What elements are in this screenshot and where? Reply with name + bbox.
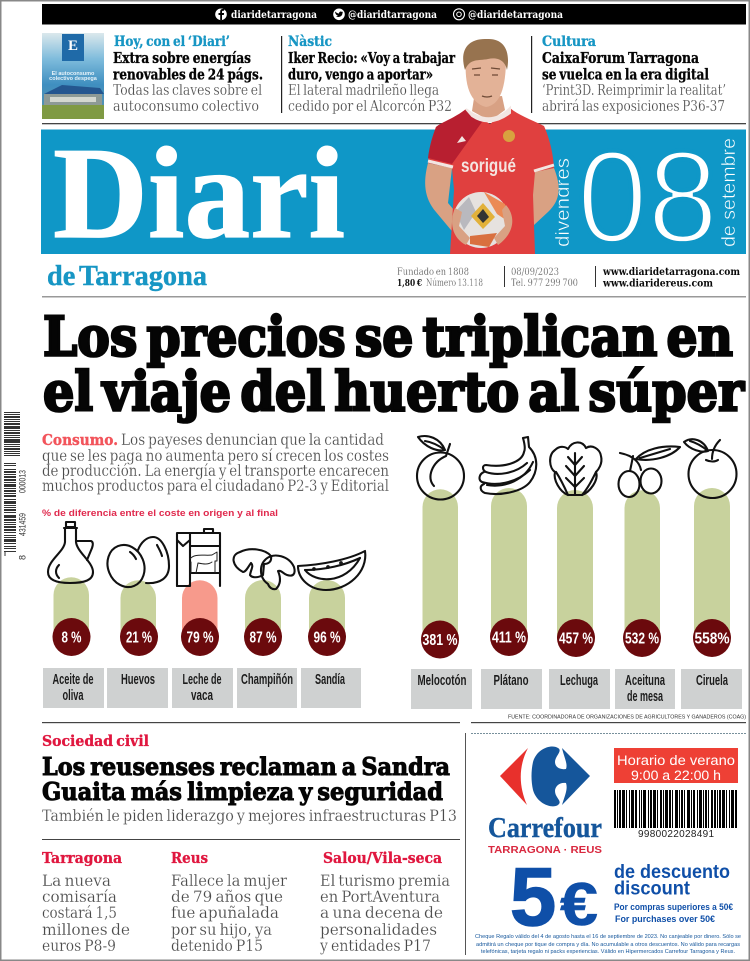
date and phone xyxy=(511,267,578,289)
summary: autoconsumo colectivo xyxy=(113,99,259,115)
hands xyxy=(452,208,470,245)
edition details: 1,80 € xyxy=(397,278,422,289)
sponsor: sorigué xyxy=(461,156,516,177)
teaser: Hoy, con el Diari xyxy=(42,33,263,119)
adidas mark xyxy=(457,136,466,143)
opening hours box: 9:00 a 22:00 h xyxy=(631,768,721,783)
date and phone: Tel. 977 299 700 xyxy=(511,278,578,289)
headline xyxy=(113,50,263,84)
edition details xyxy=(397,267,483,289)
icon: facebook xyxy=(215,8,227,20)
hair xyxy=(463,39,508,70)
label: aceite de oliva xyxy=(43,668,104,708)
label: leche de vaca xyxy=(172,668,233,708)
brief: Tarragona: comisaría xyxy=(42,887,117,906)
headline xyxy=(542,50,709,84)
discount description: For purchases over 50€ xyxy=(615,914,715,924)
month: de setembre xyxy=(719,138,740,247)
bar: aceite de oliva xyxy=(52,577,90,656)
headline: Guaita más limpieza y seguridad xyxy=(42,777,443,806)
bar: aceituna de mesa: 532 % xyxy=(625,630,659,648)
coupon barcode: 9980022028491 xyxy=(638,829,714,840)
intro paragraph: de producción. La energía y el transporte encarecen xyxy=(42,462,389,480)
summary: El lateral madrileño llega xyxy=(288,83,439,99)
discount amount: 5 xyxy=(510,850,556,943)
label: huevos: Huevos xyxy=(121,672,155,688)
day number: 08 xyxy=(577,123,718,270)
collar xyxy=(466,108,510,121)
product barcode: 8 xyxy=(18,555,28,560)
label: lechuga: Lechuga xyxy=(560,673,599,689)
opening hours box: Horario de verano xyxy=(617,753,735,768)
brief: Reus: Reus xyxy=(171,850,208,867)
icon: peach xyxy=(417,436,464,500)
icon: Carrefour logo xyxy=(500,747,590,806)
label: leche de vaca: vaca xyxy=(191,688,214,704)
icon: milk carton xyxy=(177,529,220,586)
discount description: discount xyxy=(614,878,691,900)
brief: Reus: por su hijo, ya xyxy=(171,920,272,939)
bar: ciruela: 558% xyxy=(694,630,730,648)
chart: low-margin products xyxy=(43,522,365,708)
label: aceituna de mesa xyxy=(615,669,675,709)
bar: melocotón xyxy=(421,489,459,658)
headline: se vuelca en la era digital xyxy=(542,66,709,84)
product barcode xyxy=(5,412,28,560)
weekday: divendres xyxy=(553,158,574,247)
chart subtitle: % de diferencia entre el coste en origen y al final xyxy=(42,508,278,518)
label: ciruela xyxy=(681,669,742,709)
headline: renovables de 24 págs. xyxy=(113,66,263,84)
summary: Todas las claves sobre el xyxy=(113,83,262,99)
headline: CaixaForum Tarragona xyxy=(542,50,700,67)
brief: Reus: de 79 años que xyxy=(171,887,283,906)
bar: champiñón: 87 % xyxy=(250,630,277,646)
label: melocotón xyxy=(411,669,472,709)
intro paragraph: muchos productos para el ciudadano P2-3 y Editorial xyxy=(42,477,389,495)
summary xyxy=(542,83,726,115)
brief: Reus: Fallece la mujer xyxy=(171,871,287,890)
headline xyxy=(42,752,450,806)
social media bar xyxy=(42,4,746,24)
magazine cover thumbnail: colectivo despega xyxy=(49,76,98,82)
brief: Salou/Vila-seca: Salou/Vila-seca xyxy=(323,850,443,867)
brief: Tarragona: costará 1,5 xyxy=(42,903,117,922)
bar: huevos: 21 % xyxy=(126,630,152,646)
jersey xyxy=(428,108,554,254)
bar: sandía xyxy=(308,580,346,656)
bar: lechuga xyxy=(557,490,595,657)
discount description: Por compras superiores a 50€ xyxy=(614,902,733,912)
advertisement: Carrefour coupon xyxy=(471,734,746,955)
bar: plátano: 411 % xyxy=(492,630,526,646)
icon: plum xyxy=(684,439,736,498)
label: champiñón: Champiñón xyxy=(241,672,293,688)
neck xyxy=(472,96,505,121)
headline: Extra sobre energías xyxy=(113,50,251,67)
icon: olives xyxy=(618,446,680,497)
store location: TARRAGONA · REUS xyxy=(488,844,602,856)
brief: Reus: fue apuñalada xyxy=(171,903,279,922)
brief: Reus: detenido P15 xyxy=(171,936,263,955)
product barcode: 000013 xyxy=(18,470,28,493)
brief: Tarragona: millones de xyxy=(42,920,130,939)
bar: plátano xyxy=(490,488,528,656)
headline: Los reusenses reclaman a Sandra xyxy=(42,752,450,781)
logo wordmark: Carrefour xyxy=(488,813,602,844)
subtitle: de Tarragona: de Tarragona xyxy=(47,260,207,292)
bar: sandía: 96 % xyxy=(314,630,341,646)
section label: Cultura xyxy=(542,34,596,50)
masthead band xyxy=(41,121,746,270)
section label: Sociedad civil xyxy=(42,733,149,750)
section label: Hoy, con el ‘Diari’ xyxy=(114,34,230,50)
summary xyxy=(288,83,452,115)
magazine cover thumbnail xyxy=(42,33,104,119)
label: huevos xyxy=(107,668,168,708)
summary xyxy=(113,83,262,115)
story: Sociedad civil xyxy=(42,733,457,825)
brief: Tarragona: Tarragona xyxy=(42,850,123,867)
bar: huevos xyxy=(120,580,158,656)
brief: Reus xyxy=(171,850,287,955)
instagram handle: @diaridetarragona xyxy=(468,9,563,21)
intro paragraph: que se les paga no aumenta pero sí crecen los costes xyxy=(42,447,389,465)
intro paragraph xyxy=(42,431,389,495)
bar: melocotón: 381 % xyxy=(422,632,458,649)
arms xyxy=(425,163,466,236)
label: aceite de oliva: oliva xyxy=(62,688,84,704)
label: melocotón: Melocotón xyxy=(418,673,466,689)
brief: Salou/Vila-seca: y entidades P17 xyxy=(319,936,431,955)
bar: aceituna de mesa xyxy=(623,490,661,657)
crest xyxy=(503,130,515,142)
label: aceite de oliva: Aceite de xyxy=(52,672,94,688)
intro paragraph: Los payeses denuncian que la cantidad xyxy=(121,431,384,449)
label: sandía: Sandía xyxy=(315,672,346,688)
bar: aceite de oliva: 8 % xyxy=(62,630,82,646)
facial features xyxy=(472,68,500,97)
icon: instagram xyxy=(454,9,464,20)
brief: Salou/Vila-seca: en PortAventura xyxy=(320,887,440,906)
fine print xyxy=(475,934,741,955)
sleeve trim xyxy=(428,161,554,171)
product barcode: 431459 xyxy=(18,513,28,536)
jersey dark shoulder xyxy=(428,109,482,164)
date and phone: 08/09/2023 xyxy=(511,267,559,278)
bar: champiñón xyxy=(244,580,282,656)
summary: También le piden liderazgo y mejores infraestructuras P13 xyxy=(42,806,457,825)
source note: FUENTE: COORDINADORA DE ORGANIZACIONES DE AGRICULTORES Y GANADEROS (COAG) xyxy=(508,714,746,720)
chart: high-margin products xyxy=(411,436,742,709)
bar: leche de vaca: 79 % xyxy=(186,630,214,646)
brief: Salou/Vila-seca: personalidades xyxy=(320,920,437,939)
brief: Salou/Vila-seca xyxy=(319,850,450,955)
icon: eggs xyxy=(101,537,169,593)
facebook handle: diaridetarragona xyxy=(231,9,317,21)
brief: Tarragona xyxy=(42,850,130,955)
label: sandía xyxy=(301,668,361,708)
label: champiñón xyxy=(237,668,297,708)
main headline xyxy=(43,304,744,424)
icon: watermelon xyxy=(298,551,365,590)
ball xyxy=(453,192,509,248)
icon: bananas xyxy=(480,437,536,494)
headline xyxy=(288,50,455,84)
fine print: telefónicas, tarjeta regalo ni packs experiencias. Válido en Hipermercados Carrefour Tarragona y Reus. xyxy=(481,949,735,955)
edition details: Número 13.118 xyxy=(426,278,483,289)
headline: Iker Recio: «Voy a trabajar xyxy=(288,50,455,67)
face xyxy=(466,48,506,107)
websites: www.diaridereus.com xyxy=(602,278,713,290)
label: plátano: Plátano xyxy=(494,673,529,689)
discount amount: € xyxy=(560,871,598,938)
brief: Tarragona: euros P8-9 xyxy=(42,936,116,955)
brief: Salou/Vila-seca: El turismo premia xyxy=(320,871,450,890)
twitter handle: @diaridtarragona xyxy=(348,9,437,21)
coupon barcode xyxy=(614,809,738,840)
label: aceituna de mesa: Aceituna xyxy=(625,673,666,689)
teaser: Nàstic xyxy=(288,34,455,115)
bar: ciruela xyxy=(693,488,731,657)
summary: cedido por el Alcorcón P32 xyxy=(288,99,452,115)
section label: Nàstic xyxy=(288,34,332,50)
icon: oil cruet xyxy=(48,522,93,583)
icon: mushrooms xyxy=(234,549,295,589)
teaser: Cultura xyxy=(542,34,726,115)
discount amount xyxy=(510,850,598,943)
brief: Tarragona: La nueva xyxy=(42,871,111,890)
discount description xyxy=(614,862,733,924)
masthead title: Diari xyxy=(53,121,345,266)
label: leche de vaca: Leche de xyxy=(182,672,222,688)
player photo xyxy=(425,39,559,254)
icon: twitter xyxy=(333,8,345,20)
discount description: de descuento xyxy=(614,862,730,883)
bar: lechuga: 457 % xyxy=(559,630,593,648)
opening hours box xyxy=(614,748,738,783)
edition details: Fundado en 1808 xyxy=(397,267,469,278)
label: aceituna de mesa: de mesa xyxy=(627,689,664,705)
fine print: Cheque Regalo válido del 4 de agosto hasta el 16 de septiembre de 2023. No canjeable por dinero. Sólo se xyxy=(475,934,741,940)
icon: lettuce xyxy=(550,442,601,495)
label: plátano xyxy=(481,669,542,709)
fine print: admitirá un cheque por tique de compra y día. No acumulable a otros descuentos. No válido para recargas xyxy=(476,942,740,948)
headline: duro, vengo a aportar» xyxy=(288,66,433,84)
label: lechuga xyxy=(549,669,610,709)
intro paragraph: Consumo. xyxy=(42,431,118,449)
label: ciruela: Ciruela xyxy=(696,673,729,689)
brief: Salou/Vila-seca: a una decena de xyxy=(320,903,443,922)
bar: leche de vaca xyxy=(181,580,219,656)
magazine cover thumbnail: E xyxy=(68,38,78,54)
websites xyxy=(602,266,740,290)
magazine cover thumbnail: El autoconsumo xyxy=(52,71,95,77)
